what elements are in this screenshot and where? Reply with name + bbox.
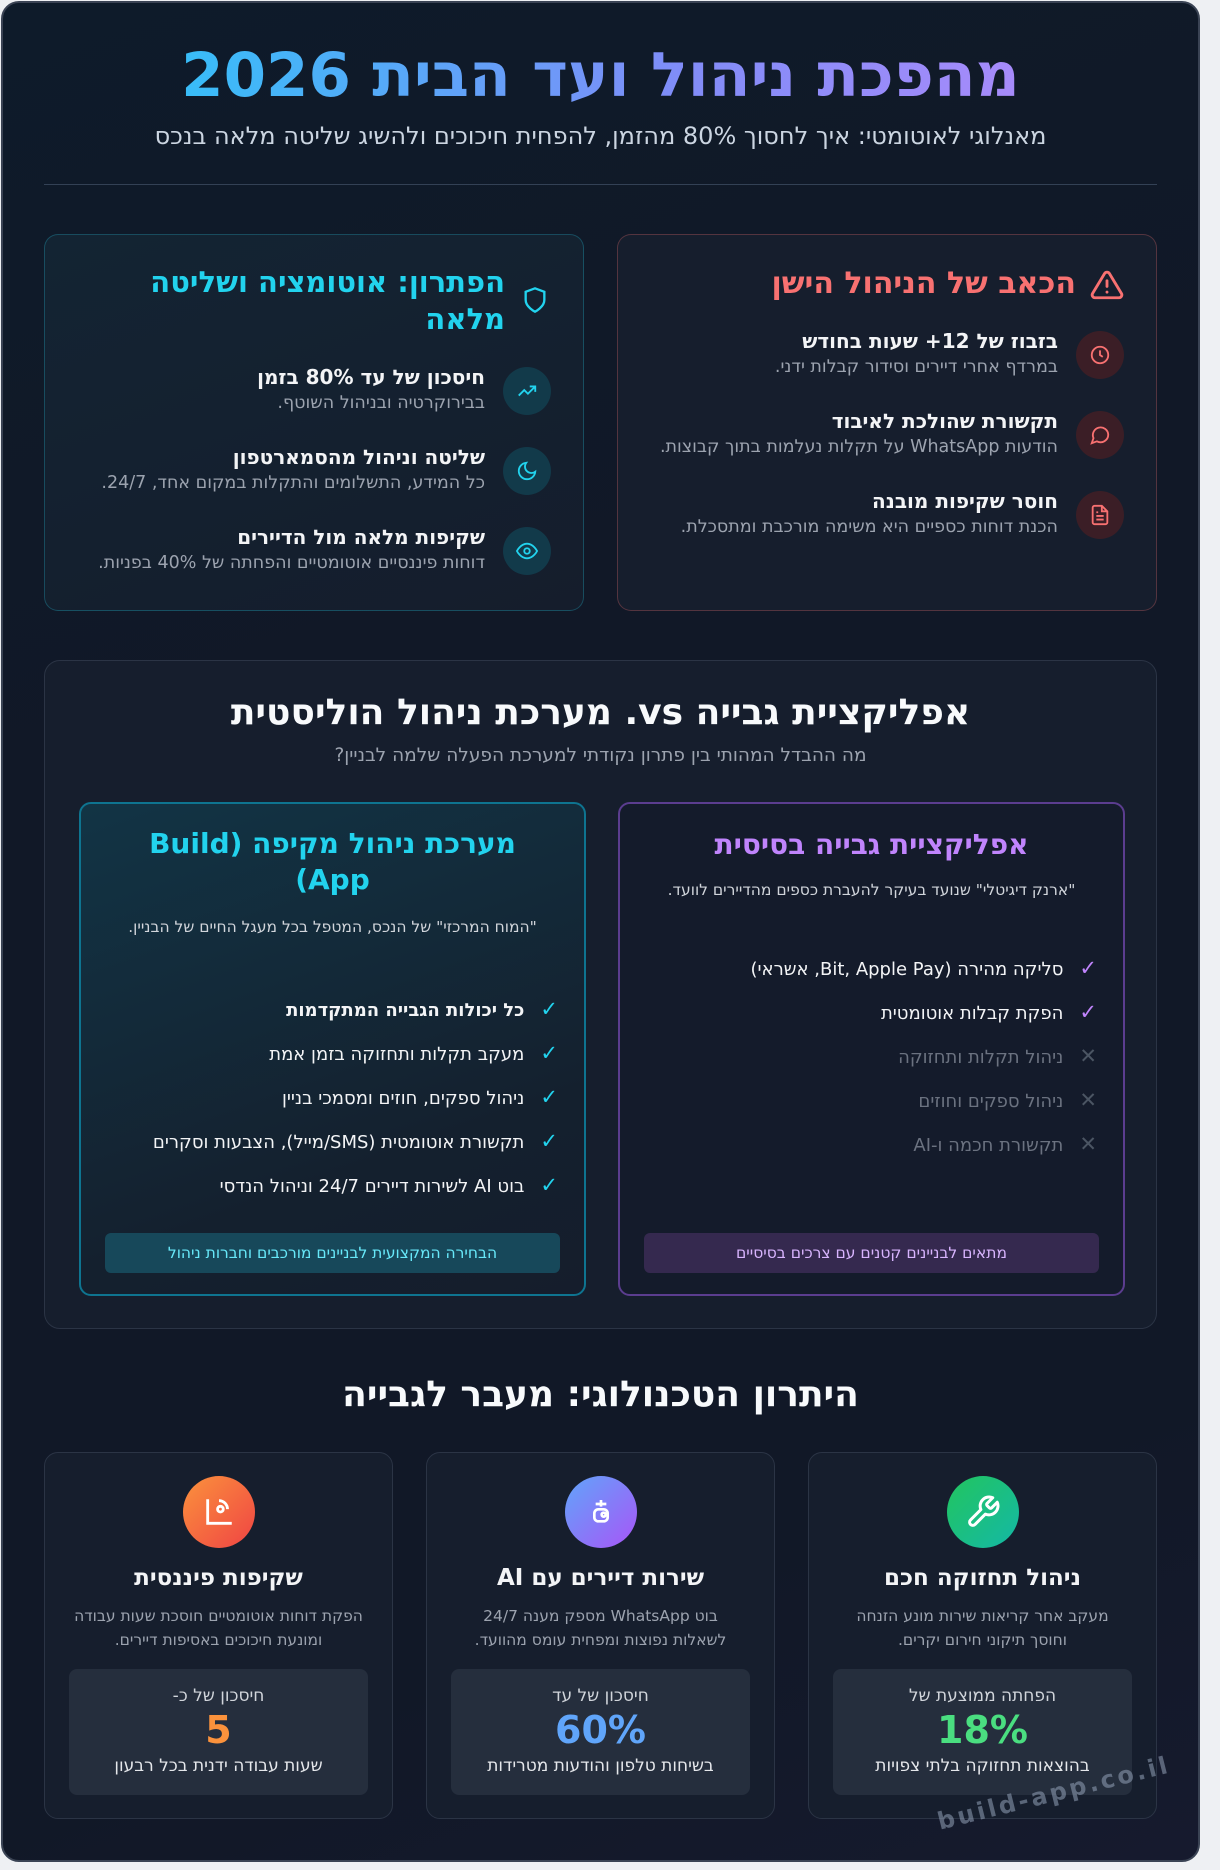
list: holistic features: [153, 997, 558, 1197]
item: lost communication: תקשורת שהולכת לאיבוד: [832, 409, 1058, 433]
stat: 60%: חיסכון של עד: [552, 1686, 649, 1706]
icon: warning: [1090, 270, 1124, 300]
card: smart maintenance: מעקב אחר קריאות שירות מונע הזנחה: [856, 1607, 1109, 1625]
list: basic app features: ✕: [1079, 1088, 1097, 1112]
item: wasted hours: [775, 329, 1124, 379]
card: holistic system: [79, 802, 586, 1296]
card: financial transparency: [44, 1452, 393, 1819]
card: AI tenant service: שירות דיירים עם AI: [497, 1565, 704, 1591]
item: time saving: [257, 365, 551, 415]
item: transparency: שקיפות מלאה מול הדיירים: [237, 525, 485, 549]
panel: comparison: [44, 660, 1157, 1329]
item: wasted hours: במרדף אחרי דיירים וסידור קבלות ידני.: [775, 357, 1058, 377]
card: smart maintenance: וחוסך תיקוני חירום יקרים.: [898, 1631, 1067, 1649]
panel: pain of old management: [617, 234, 1157, 611]
item: lack of transparency: [681, 489, 1124, 539]
pill: basic app fit: [644, 1233, 1099, 1273]
list: holistic features: כל יכולות הגבייה המתקדמות: [286, 1000, 524, 1021]
icon: wrench: [947, 1476, 1019, 1548]
item: smartphone control: שליטה וניהול מהסמארטפון: [233, 445, 485, 469]
list: holistic features: מעקב תקלות ותחזוקה בזמן אמת: [269, 1044, 524, 1065]
list: holistic features: ✓: [540, 1173, 558, 1197]
list: basic app features: ניהול תקלות ותחזוקה: [898, 1047, 1063, 1068]
item: transparency: דוחות פיננסיים אוטומטיים והפחתה של 40% בפניות.: [98, 553, 485, 573]
card: AI tenant service: [426, 1452, 775, 1819]
item: time saving: בבירוקרטיה ובניהול השוטף.: [277, 393, 485, 413]
pill: holistic fit: הבחירה המקצועית לבניינים מורכבים וחברות ניהול: [168, 1244, 497, 1262]
icon: chart: [183, 1476, 255, 1548]
heading: solution: הפתרון: אוטומציה ושליטה מלאה: [150, 265, 505, 336]
stat: 5 hours: 5: [205, 1708, 232, 1752]
icon: bot: [565, 1476, 637, 1548]
list: holistic features: ✓: [540, 1041, 558, 1065]
item: lack of transparency: הכנת דוחות כספיים היא משימה מורכבת ומתסכלת.: [681, 517, 1058, 537]
list: holistic features: בוט AI לשירות דיירים 24/7 וניהול הנדסי: [220, 1176, 524, 1197]
heading: pain: הכאב של הניהול הישן: [771, 266, 1076, 301]
quote: basic app: "ארנק דיגיטלי" שנועד בעיקר להעברת כספים מהדיירים לוועד.: [668, 881, 1075, 899]
subtitle: מאנלוגי לאוטומטי: איך לחסוך 80% מהזמן, להפחית חיכוכים ולהשיג שליטה מלאה בנכס: [155, 122, 1046, 150]
list: holistic features: ✓: [540, 1085, 558, 1109]
list: basic app features: [750, 956, 1097, 1156]
quote: holistic system: "המוח המרכזי" של הנכס, המטפל בכל מעגל החיים של הבניין.: [128, 918, 537, 936]
stat: 60%: [451, 1669, 750, 1795]
list: holistic features: ✓: [540, 1129, 558, 1153]
panel: solution: [44, 234, 584, 611]
stat: 18%: 18%: [937, 1708, 1028, 1752]
card: financial transparency: הפקת דוחות אוטומטיים חוסכת שעות עבודה: [74, 1607, 363, 1625]
item: lost communication: הודעות WhatsApp על תקלות נעלמות בתוך קבוצות.: [660, 437, 1058, 457]
list: basic app features: הפקת קבלות אוטומטית: [881, 1003, 1063, 1024]
list: basic app features: ניהול ספקים וחוזים: [918, 1091, 1063, 1112]
list: basic app features: ✕: [1079, 1044, 1097, 1068]
title: מהפכת ניהול ועד הבית 2026: [181, 40, 1020, 111]
card: AI tenant service: לשאלות נפוצות ומפחית עומס מהוועד.: [475, 1631, 726, 1649]
card: AI tenant service: בוט WhatsApp מספק מענה 24/7: [483, 1607, 718, 1625]
watermark: build-app.co.il: [935, 1751, 1173, 1836]
list: holistic features: ניהול ספקים, חוזים ומסמכי בניין: [282, 1088, 524, 1109]
heading: comparison: אפליקציית גבייה vs. מערכת ניהול הוליסטית: [231, 692, 970, 733]
stat: 18%: בהוצאות תחזוקה בלתי צפויות: [875, 1756, 1090, 1776]
pill: holistic fit: [105, 1233, 560, 1273]
heading: holistic system: מערכת ניהול מקיפה (Build App): [149, 827, 516, 896]
subtitle: comparison: מה ההבדל המהותי בין פתרון נקודתי למערכת הפעלה שלמה לבניין?: [334, 745, 867, 766]
item: wasted hours: בזבוז של 12+ שעות בחודש: [802, 329, 1058, 353]
stat: 5 hours: [69, 1669, 368, 1795]
card: financial transparency: שקיפות פיננסית: [134, 1565, 303, 1591]
heading: technological advantage: היתרון הטכנולוגי: מעבר לגבייה: [342, 1374, 859, 1415]
stat: 18%: הפחתה ממוצעת של: [909, 1686, 1056, 1706]
list: holistic features: תקשורת אוטומטית (SMS/מייל), הצבעות וסקרים: [153, 1132, 524, 1153]
list: basic app features: ✕: [1079, 1132, 1097, 1156]
stat: 5 hours: חיסכון של כ-: [173, 1686, 264, 1706]
card: smart maintenance: [808, 1452, 1157, 1819]
item: smartphone control: כל המידע, התשלומים והתקלות במקום אחד, 24/7.: [101, 473, 485, 493]
item: transparency: [98, 525, 551, 575]
item: lost communication: [660, 409, 1124, 459]
item: lack of transparency: חוסר שקיפות מובנה: [872, 489, 1058, 513]
item: time saving: חיסכון של עד 80% בזמן: [257, 365, 485, 389]
card: financial transparency: ומונעת חיכוכים באסיפות דיירים.: [115, 1631, 322, 1649]
item: smartphone control: [101, 445, 551, 495]
heading: basic app: אפליקציית גבייה בסיסית: [714, 828, 1029, 861]
icon: shield: [524, 287, 546, 313]
stat: 60%: 60%: [555, 1708, 646, 1752]
card: basic collection app: [618, 802, 1125, 1296]
list: holistic features: ✓: [540, 997, 558, 1021]
stat: 5 hours: שעות עבודה ידנית בכל רבעון: [114, 1756, 323, 1776]
list: basic app features: ✓: [1079, 956, 1097, 980]
stat: 60%: בשיחות טלפון והודעות מטרידות: [487, 1756, 714, 1776]
card: smart maintenance: ניהול תחזוקה חכם: [884, 1565, 1081, 1591]
list: basic app features: תקשורת חכמה ו-AI: [913, 1135, 1063, 1156]
pill: basic app fit: מתאים לבניינים קטנים עם צרכים בסיסיים: [736, 1244, 1007, 1262]
stat: 18%: [833, 1669, 1132, 1795]
list: basic app features: ✓: [1079, 1000, 1097, 1024]
list: basic app features: סליקה מהירה (Bit, Apple Pay, אשראי): [750, 959, 1063, 980]
